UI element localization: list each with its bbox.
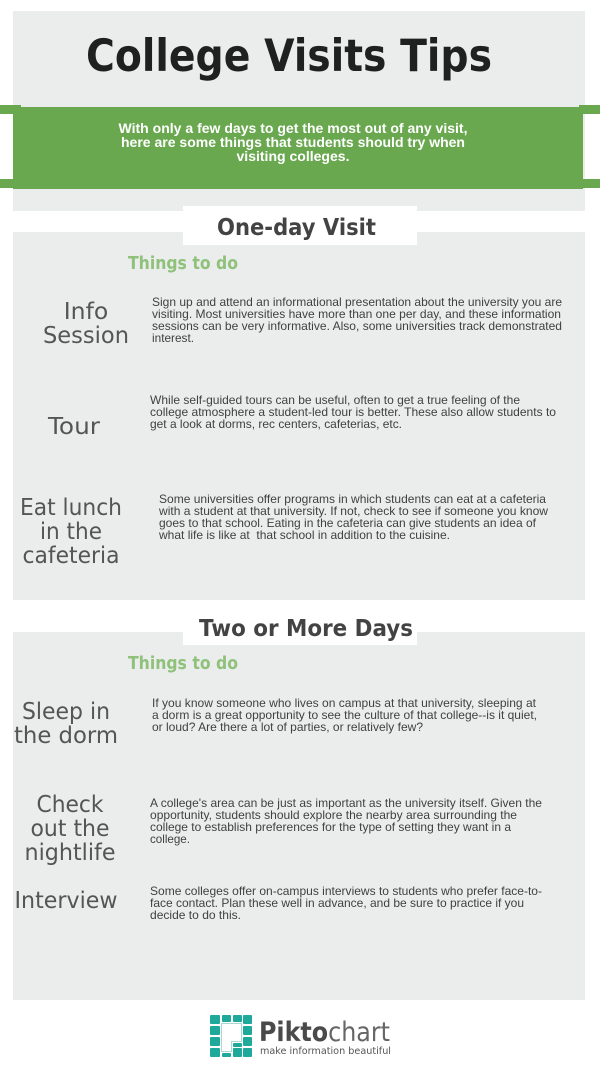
item: eat lunch: goes to that school. Eating in the cafeteria can give students an idea of	[159, 516, 537, 530]
logo wordmark: Piktochart	[259, 1017, 390, 1048]
title: College Visits Tips	[86, 31, 492, 82]
item: eat lunch	[20, 492, 548, 569]
item: info session	[43, 295, 562, 349]
item: tour: Tour	[47, 412, 100, 440]
item: interview: Interview	[14, 886, 118, 914]
banner text	[118, 120, 467, 164]
heading box: two or more days: Two or More Days	[199, 616, 413, 642]
item: check out the nightlife	[24, 790, 542, 866]
green banner	[0, 105, 600, 189]
item: interview: Some colleges offer on-campus interviews to students who prefer face-to-	[150, 884, 542, 898]
item: info session: sessions can be very informative. Also, some universities track demonstrated	[152, 319, 562, 333]
panel: two or more days	[13, 612, 585, 1000]
item: eat lunch: Some universities offer programs in which students can eat at a cafeteria	[159, 492, 546, 506]
item: tour: While self-guided tours can be useful, often to get a true feeling of the	[150, 393, 520, 407]
header panel	[13, 11, 585, 211]
item: sleep in the dorm: or loud? Are there a lot of parties, or relatively few?	[152, 720, 423, 734]
item: check out the nightlife: nightlife	[24, 838, 116, 866]
item: check out the nightlife: out the	[30, 814, 110, 842]
item: interview: decide to do this.	[150, 908, 241, 922]
item: eat lunch: Eat lunch	[20, 493, 122, 521]
icon: piktochart mark	[210, 1015, 252, 1057]
heading box: one-day visit: One-day Visit	[217, 215, 376, 241]
item: info session: interest.	[152, 331, 194, 345]
item: sleep in the dorm: a dorm is a great opportunity to see the culture of that college--is it quiet,	[152, 708, 537, 722]
item: eat lunch: what life is like at that school in addition to the cuisine.	[158, 528, 450, 542]
item: info session: Sign up and attend an informational presentation about the university you are	[152, 295, 562, 309]
item: sleep in the dorm: If you know someone who lives on campus at that university, sleeping at	[152, 696, 537, 710]
item: info session: visiting. Most universities have more than one per day, and these information	[152, 307, 561, 321]
item: info session: Session	[43, 321, 129, 349]
item: interview: face contact. Plan these well in advance, and be sure to practice if you	[150, 896, 524, 910]
banner text: With only a few days to get the most out of any visit,	[118, 120, 467, 136]
item: tour: college atmosphere a student-led tour is better. These also allow students to	[150, 405, 556, 419]
subheading: things to do: Things to do	[128, 654, 238, 674]
item: check out the nightlife: opportunity, students should explore the nearby area surrounding the	[150, 808, 517, 822]
banner text: here are some things that students should try when	[121, 134, 465, 150]
item: eat lunch: with a student at that university. If not, check to see if someone you know	[158, 504, 548, 518]
heading box: one-day visit	[183, 206, 417, 245]
item: check out the nightlife: college to establish preferences for the type of setting they want in a	[150, 820, 511, 834]
subheading: things to do: Things to do	[128, 254, 238, 274]
banner text: visiting colleges.	[236, 148, 350, 164]
item: sleep in the dorm: Sleep in	[22, 697, 110, 725]
item: eat lunch: in the	[40, 517, 102, 545]
logo tagline: make information beautiful	[260, 1046, 391, 1057]
item: interview	[14, 884, 542, 922]
panel: one-day visit	[13, 206, 585, 600]
item: tour	[47, 393, 556, 440]
item: check out the nightlife: Check	[36, 790, 104, 818]
item: check out the nightlife: college.	[150, 832, 190, 846]
item: sleep in the dorm: the dorm	[14, 721, 118, 749]
item: sleep in the dorm	[14, 696, 537, 749]
item: eat lunch: cafeteria	[22, 541, 120, 569]
item: info session: Info	[64, 297, 108, 325]
piktochart logo	[210, 1015, 391, 1057]
item: tour: get a look at dorms, rec centers, cafeterias, etc.	[150, 417, 402, 431]
item: check out the nightlife: A college's area can be just as important as the university itself. Given the	[150, 796, 542, 810]
